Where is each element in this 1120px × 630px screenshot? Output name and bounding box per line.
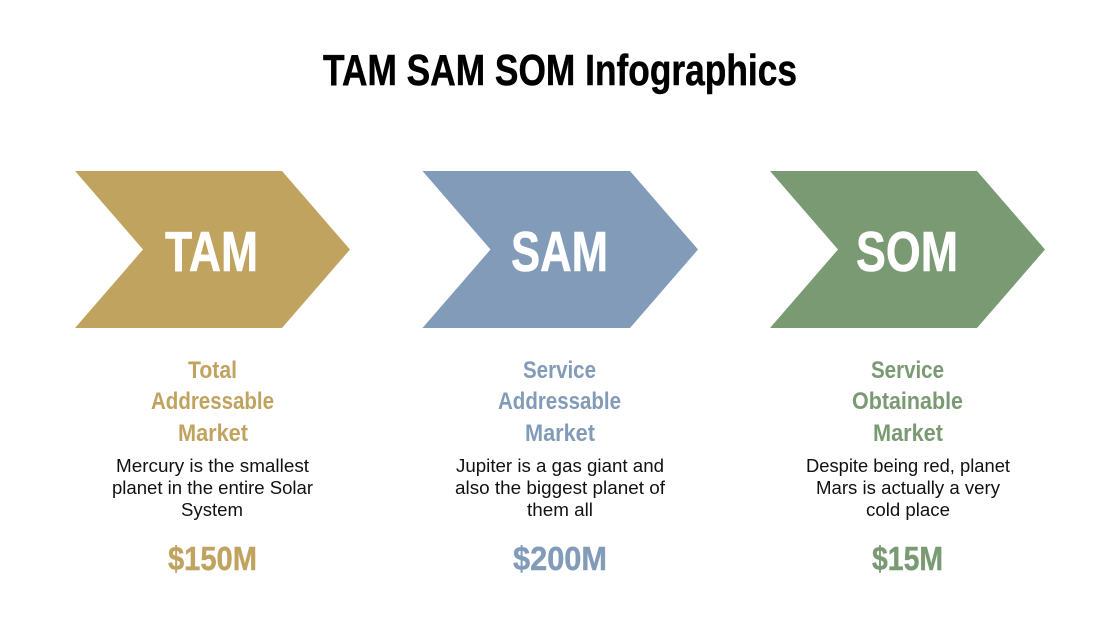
value: $150M: $150M xyxy=(168,540,257,577)
heading: Total Addressable Market: Addressable xyxy=(151,388,274,415)
heading: Service Addressable Market: Market xyxy=(525,420,595,447)
text: TAM description xyxy=(112,455,313,520)
heading: Service Addressable Market: Service xyxy=(523,357,596,384)
arrow: SAM xyxy=(422,171,698,328)
text: SOM description: Mars is actually a very xyxy=(816,477,1001,498)
value: $200M: $200M xyxy=(513,540,607,577)
heading: Service Obtainable Market: Market xyxy=(873,420,943,447)
text: TAM description: System xyxy=(181,499,243,520)
arrow: TAM xyxy=(75,171,350,328)
heading: Total Addressable Market: Market xyxy=(178,420,248,447)
heading: Service Addressable Market: Addressable xyxy=(498,388,621,415)
text: SOM description: Despite being red, planet xyxy=(806,455,1010,476)
heading: Service Obtainable Market: Obtainable xyxy=(852,388,963,415)
text: SAM description: them all xyxy=(527,499,593,520)
heading: Total Addressable Market xyxy=(151,357,274,447)
arrow: SAM: SAM xyxy=(511,220,608,284)
heading: Service Obtainable Market: Service xyxy=(871,357,944,384)
panel: SOM xyxy=(770,171,1045,577)
heading: Total Addressable Market: Total xyxy=(188,357,237,384)
text: SAM description xyxy=(455,455,666,520)
text: SOM description xyxy=(806,455,1010,520)
text: SOM description: cold place xyxy=(866,499,950,520)
value: $15M: $15M xyxy=(872,540,943,577)
panel: TAM xyxy=(75,171,350,577)
text: TAM description: planet in the entire Solar xyxy=(112,477,313,498)
heading: Service Obtainable Market xyxy=(852,357,963,447)
arrow: TAM: TAM xyxy=(165,220,258,284)
text: SAM description: also the biggest planet of xyxy=(455,477,666,498)
text: TAM description: Mercury is the smallest xyxy=(116,455,309,476)
panel: SAM xyxy=(422,171,698,577)
arrow: SOM: SOM xyxy=(856,220,958,284)
arrow: SOM xyxy=(770,171,1045,328)
title: TAM SAM SOM Infographics xyxy=(323,46,797,95)
text: SAM description: Jupiter is a gas giant and xyxy=(456,455,664,476)
heading: Service Addressable Market xyxy=(498,357,621,447)
